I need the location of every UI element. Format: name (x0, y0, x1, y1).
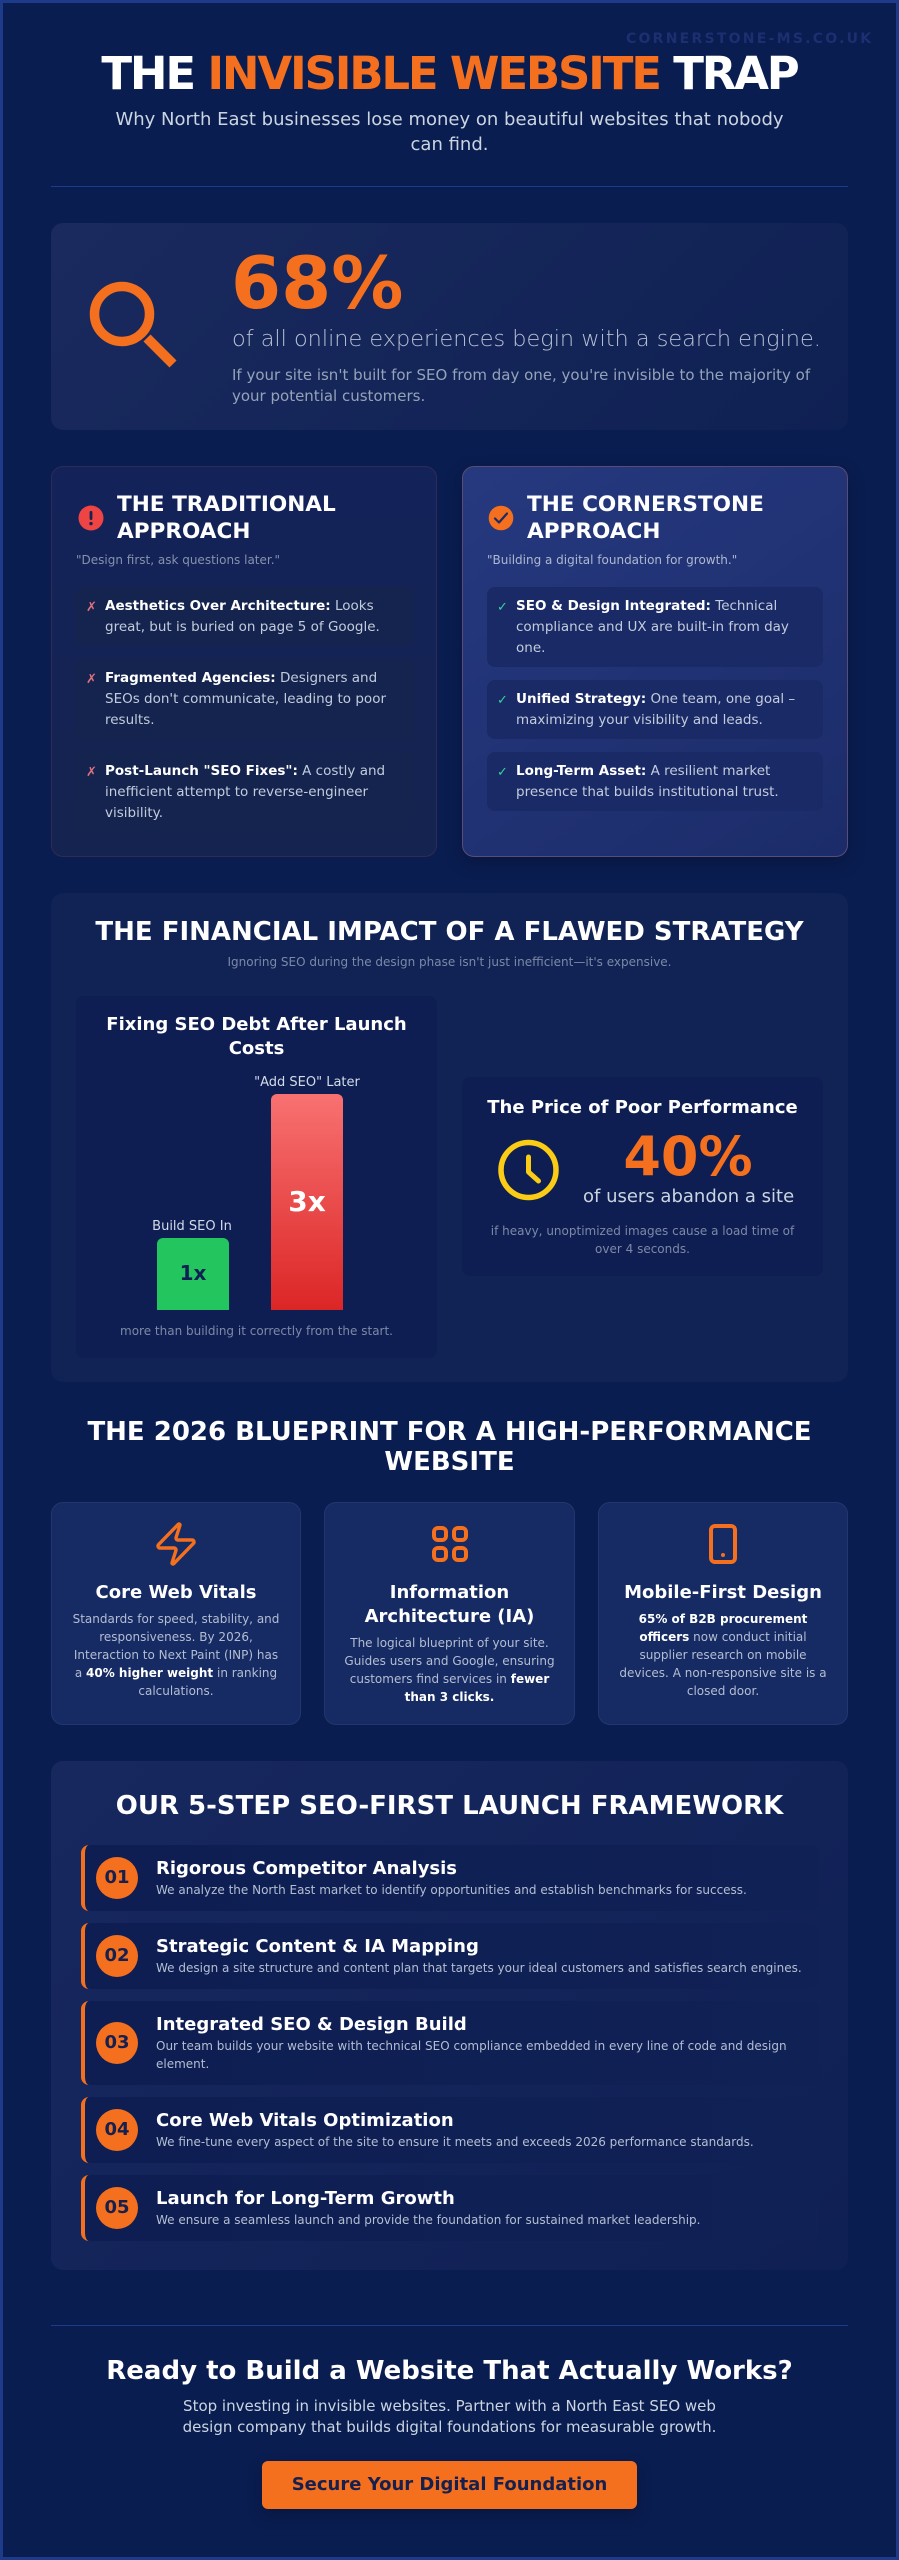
card text: Standards for speed, stability, and (73, 1612, 279, 1626)
number badge: 05 (104, 2197, 130, 2218)
heading: blueprint (87, 1417, 812, 1477)
heading: THE TRADITIONAL (117, 492, 336, 517)
step text: We design a site structure and content plan that targets your ideal customers and satisfies search engines. (156, 1961, 802, 1975)
heading: OUR 5-STEP SEO-FIRST LAUNCH FRAMEWORK (116, 1791, 783, 1821)
card text: responsiveness. By 2026, (99, 1630, 253, 1644)
heading (527, 492, 764, 544)
item: seo and design: compliance and UX are built-in from day (516, 619, 789, 635)
card text (619, 1612, 827, 1698)
subtitle: Why North East businesses lose money on beautiful websites that nobody (115, 109, 784, 130)
step 3 (81, 2001, 819, 2085)
item: unified strategy: Unified Strategy: One team, one goal – (516, 691, 795, 707)
number badge: 01 (104, 1867, 130, 1888)
item: unified strategy: ✓ (497, 693, 508, 708)
number badge (96, 2022, 138, 2064)
chart title: Fixing SEO Debt After Launch (106, 1014, 407, 1035)
card text: customers find services in fewer (350, 1672, 549, 1686)
subheading: Ignoring SEO during the design phase isn't just inefficient—it's expensive. (228, 955, 672, 969)
item: long-term asset: presence that builds institutional trust. (516, 784, 779, 800)
bar value: 1x: 1x (180, 1261, 206, 1285)
step title: Rigorous Competitor Analysis (156, 1858, 457, 1879)
icon: warning (78, 506, 104, 530)
item: post-launch fixes (76, 752, 413, 832)
stat explanation: your potential customers. (232, 387, 425, 405)
heading: blueprint: WEBSITE (384, 1447, 515, 1477)
card: poor performance (462, 1077, 823, 1276)
cta text (183, 2397, 716, 2436)
card title: Architecture (IA) (365, 1606, 534, 1627)
subtitle: can find. (411, 134, 488, 155)
number badge: 04 (104, 2119, 130, 2140)
heading: APPROACH (117, 519, 250, 544)
card: mobile first (598, 1502, 848, 1725)
item: seo and design: SEO & Design Integrated: Technical (516, 598, 777, 614)
item: post-launch fixes: ✗ (86, 765, 97, 780)
card text: 65% of B2B procurement (639, 1612, 807, 1626)
step text: element. (156, 2057, 209, 2071)
stat explanation (232, 366, 810, 405)
number badge (96, 1935, 138, 1977)
card text: Guides users and Google, ensuring (344, 1654, 555, 1668)
panel: traditional approach (51, 466, 437, 857)
item: aesthetics: Aesthetics Over Architecture: Looks (105, 598, 374, 614)
cta button (262, 2461, 637, 2509)
item: fragmented agencies: Fragmented Agencies: Designers and (105, 670, 377, 686)
title: THE INVISIBLE WEBSITE TRAP (101, 47, 798, 100)
label: add seo later: "Add SEO" Later (254, 1075, 360, 1090)
stat caption: of all online experiences begin with a search engine. (232, 326, 821, 352)
quote: "Building a digital foundation for growth." (487, 553, 737, 567)
stat: 40%: 40% (623, 1125, 753, 1188)
card text: devices. A non-responsive site is a (619, 1666, 827, 1680)
item: post-launch fixes: inefficient attempt to reverse-engineer (105, 784, 368, 800)
number badge (96, 2187, 138, 2229)
stat note: if heavy, unoptimized images cause a load time of (491, 1224, 794, 1238)
stat note (491, 1224, 794, 1256)
card text: than 3 clicks. (405, 1690, 494, 1704)
card text: supplier research on mobile (639, 1648, 807, 1662)
item: seo and design: one. (516, 640, 545, 656)
panel: cornerstone approach (462, 466, 848, 857)
stat note: over 4 seconds. (595, 1242, 690, 1256)
watermark: CORNERSTONE-MS.CO.UK (626, 31, 873, 47)
card text: Interaction to Next Paint (INP) has (74, 1648, 278, 1662)
card text: officers now conduct initial (639, 1630, 807, 1644)
number badge (96, 2109, 138, 2151)
card text: a 40% higher weight in ranking (75, 1666, 277, 1680)
item: long-term asset (487, 752, 823, 811)
card title: The Price of Poor Performance (487, 1097, 798, 1118)
chart title (106, 1014, 407, 1059)
card text (344, 1636, 555, 1704)
card: information architecture (324, 1502, 575, 1725)
heading (117, 492, 336, 544)
card: SEO debt chart (76, 996, 437, 1358)
step text: We fine-tune every aspect of the site to ensure it meets and exceeds 2026 performance standards. (156, 2135, 754, 2149)
step text: Our team builds your website with technical SEO compliance embedded in every line of code and design (156, 2039, 787, 2053)
item: post-launch fixes: Post-Launch "SEO Fixes": A costly and (105, 763, 385, 779)
step text (156, 2039, 787, 2071)
item: fragmented agencies: SEOs don't communicate, leading to poor (105, 691, 386, 707)
cta text: Stop investing in invisible websites. Partner with a North East SEO web (183, 2397, 716, 2415)
item: aesthetics: great, but is buried on page 5 of Google. (105, 619, 380, 635)
step text: We analyze the North East market to identify opportunities and establish benchmarks for success. (156, 1883, 747, 1897)
item: aesthetics: ✗ (86, 600, 97, 615)
bar: 3x (271, 1094, 343, 1310)
card text (73, 1612, 279, 1698)
step 2 (81, 1923, 819, 1989)
item: unified strategy: maximizing your visibility and leads. (516, 712, 763, 728)
chart title: Costs (229, 1038, 284, 1059)
step title: Core Web Vitals Optimization (156, 2110, 454, 2131)
stat caption: of users abandon a site (583, 1186, 794, 1207)
step 4 (81, 2097, 819, 2163)
item: long-term asset: Long-Term Asset: A resilient market (516, 763, 770, 779)
stat: 68%: 68% (231, 241, 403, 325)
item: seo and design: ✓ (497, 600, 508, 615)
heading: blueprint: THE 2026 BLUEPRINT FOR A HIGH-PERFORMANCE (87, 1417, 812, 1447)
stat explanation: If your site isn't built for SEO from day one, you're invisible to the majority of (232, 366, 810, 384)
panel: 68% stat (51, 223, 848, 430)
chart note: more than building it correctly from the start. (120, 1324, 393, 1338)
icon: grid (432, 1526, 468, 1562)
cta heading: Ready to Build a Website That Actually Works? (106, 2356, 793, 2386)
card text: calculations. (138, 1684, 214, 1698)
panel: financial impact (51, 893, 848, 1382)
item: long-term asset: ✓ (497, 765, 508, 780)
quote: "Design first, ask questions later." (76, 553, 280, 567)
bar value: 3x: 3x (288, 1185, 326, 1218)
item: post-launch fixes: visibility. (105, 805, 163, 821)
card title (364, 1582, 534, 1627)
bar: 1x (157, 1238, 229, 1310)
step title: Strategic Content & IA Mapping (156, 1936, 479, 1957)
item: unified strategy (487, 680, 823, 739)
icon: check badge (488, 506, 514, 530)
item: seo and design (487, 587, 823, 667)
panel: five-step framework (51, 1761, 848, 2270)
item: fragmented agencies: results. (105, 712, 155, 728)
card title: Core Web Vitals (96, 1582, 256, 1603)
icon: phone (709, 1524, 737, 1564)
card: core web vitals (51, 1502, 301, 1725)
number badge (96, 1857, 138, 1899)
icon: magnifying glass (90, 282, 176, 368)
heading: THE CORNERSTONE (527, 492, 764, 517)
step title: Launch for Long-Term Growth (156, 2188, 455, 2209)
subtitle (115, 109, 784, 155)
card text: The logical blueprint of your site. (350, 1636, 549, 1650)
heading: THE FINANCIAL IMPACT OF A FLAWED STRATEGY (95, 917, 804, 947)
step title: Integrated SEO & Design Build (156, 2014, 467, 2035)
step 5 (81, 2175, 819, 2241)
card title: Information (390, 1582, 509, 1603)
step 1 (81, 1845, 819, 1911)
step text: We ensure a seamless launch and provide the foundation for sustained market leadership. (156, 2213, 700, 2227)
item: fragmented agencies: ✗ (86, 672, 97, 687)
cta text: design company that builds digital foundations for measurable growth. (183, 2418, 716, 2436)
card title: Mobile-First Design (624, 1582, 822, 1603)
item: fragmented agencies (76, 659, 413, 739)
number badge: 02 (104, 1945, 130, 1966)
item: aesthetics (76, 587, 413, 646)
label: build seo in: Build SEO In (152, 1219, 232, 1234)
card text: closed door. (687, 1684, 759, 1698)
number badge: 03 (104, 2032, 130, 2053)
icon: bolt (156, 1522, 196, 1566)
heading: APPROACH (527, 519, 660, 544)
cta button: Secure Your Digital Foundation (292, 2474, 607, 2495)
icon: clock (498, 1140, 559, 1200)
